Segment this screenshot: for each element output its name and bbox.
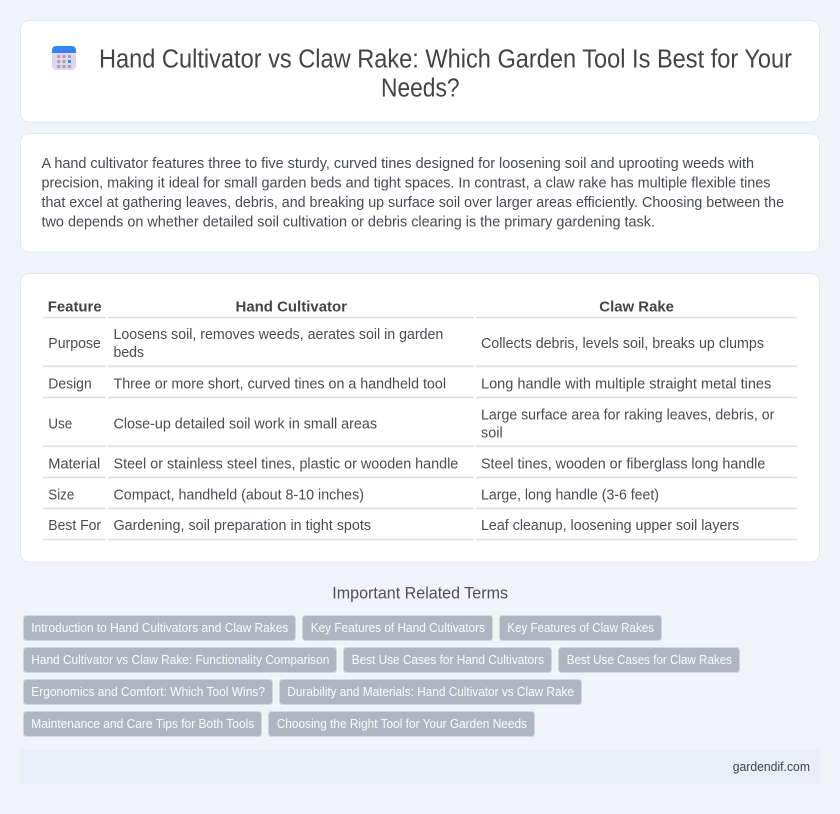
- tag: Ergonomics and Comfort: Which Tool Wins?: [31, 685, 265, 699]
- tag: Maintenance and Care Tips for Both Tools: [31, 717, 254, 731]
- table row: purpose: beds: [114, 345, 144, 361]
- tag: Best Use Cases for Hand Cultivators: [352, 653, 544, 667]
- tag: Key Features of Hand Cultivators: [311, 621, 485, 635]
- table row: size: Large, long handle (3-6 feet): [481, 487, 659, 503]
- text block: introduction paragraph: that excel at gathering leaves, debris, and breaking up surface soil over larger areas efficiently. Choosing between the: [42, 195, 784, 211]
- tag: [344, 648, 552, 672]
- text block: introduction paragraph: precision, making it ideal for small garden beds and tight spaces. In contrast, a claw rake has multiple flexible tines: [42, 176, 770, 192]
- table row: material: Steel tines, wooden or fiberglass long handle: [481, 456, 765, 472]
- panel: header: [20, 20, 820, 122]
- table row: design: [43, 376, 797, 397]
- table row: best for: Best For: [48, 518, 101, 534]
- table row: best for: Leaf cleanup, loosening upper soil layers: [481, 518, 739, 534]
- tag: [24, 680, 272, 704]
- text block: introduction paragraph: A hand cultivator features three to five sturdy, curved tines designed for loosening soil and uprooting weeds with: [42, 156, 754, 172]
- tag: [24, 648, 336, 672]
- footer: [20, 750, 820, 784]
- table header: Feature: [48, 299, 102, 316]
- table row: material: Material: [48, 456, 100, 472]
- tag list: related terms: [24, 616, 740, 736]
- table row: use: [43, 407, 797, 446]
- tag: [24, 616, 296, 640]
- table row: design: Long handle with multiple straight metal tines: [481, 376, 771, 392]
- table header: [43, 299, 797, 318]
- tag: [302, 616, 492, 640]
- table row: use: Use: [48, 416, 72, 432]
- table row: purpose: Collects debris, levels soil, breaks up clumps: [481, 336, 764, 352]
- title: Needs?: [381, 74, 460, 102]
- table row: use: Large surface area for raking leaves, debris, or: [481, 407, 774, 423]
- panel: comparison table: [20, 274, 820, 562]
- table row: purpose: [43, 327, 797, 366]
- footer: gardendif.com: [733, 760, 810, 774]
- table row: best for: Gardening, soil preparation in tight spots: [114, 518, 371, 534]
- text block: introduction paragraph: two depends on whether detailed soil cultivation or debris clearing is the primary gardening task.: [42, 214, 655, 230]
- table header: Claw Rake: [599, 299, 674, 316]
- table row: use: soil: [481, 425, 503, 441]
- panel: introduction: [20, 134, 820, 252]
- tag: Key Features of Claw Rakes: [507, 621, 654, 635]
- tag: Choosing the Right Tool for Your Garden Needs: [277, 717, 527, 731]
- table row: purpose: Purpose: [48, 336, 101, 352]
- table row: size: Size: [48, 487, 74, 503]
- table row: best for: [43, 518, 797, 539]
- tag: [500, 616, 662, 640]
- tag: Durability and Materials: Hand Cultivator vs Claw Rake: [287, 685, 574, 699]
- table row: design: Three or more short, curved tines on a handheld tool: [114, 376, 446, 392]
- tag: Best Use Cases for Claw Rakes: [567, 653, 732, 667]
- tag: [268, 712, 534, 736]
- heading: important related terms: Important Related Terms: [332, 584, 508, 602]
- icon: calendar: [52, 46, 76, 70]
- tag: [558, 648, 740, 672]
- table row: material: [43, 456, 797, 477]
- tag: [280, 680, 582, 704]
- table row: use: Close-up detailed soil work in small areas: [114, 416, 377, 432]
- title: [99, 46, 792, 102]
- tag: [24, 712, 262, 736]
- table row: material: Steel or stainless steel tines, plastic or wooden handle: [114, 456, 458, 472]
- table row: size: Compact, handheld (about 8-10 inches): [114, 487, 364, 503]
- table row: purpose: Loosens soil, removes weeds, aerates soil in garden: [114, 327, 443, 343]
- tag: Hand Cultivator vs Claw Rake: Functionality Comparison: [31, 653, 329, 667]
- table row: design: Design: [48, 376, 92, 392]
- table header: Hand Cultivator: [236, 299, 347, 316]
- text block: introduction paragraph: [42, 156, 784, 230]
- tag: Introduction to Hand Cultivators and Claw Rakes: [31, 621, 288, 635]
- title: Hand Cultivator vs Claw Rake: Which Garden Tool Is Best for Your: [99, 46, 792, 74]
- table row: size: [43, 487, 797, 508]
